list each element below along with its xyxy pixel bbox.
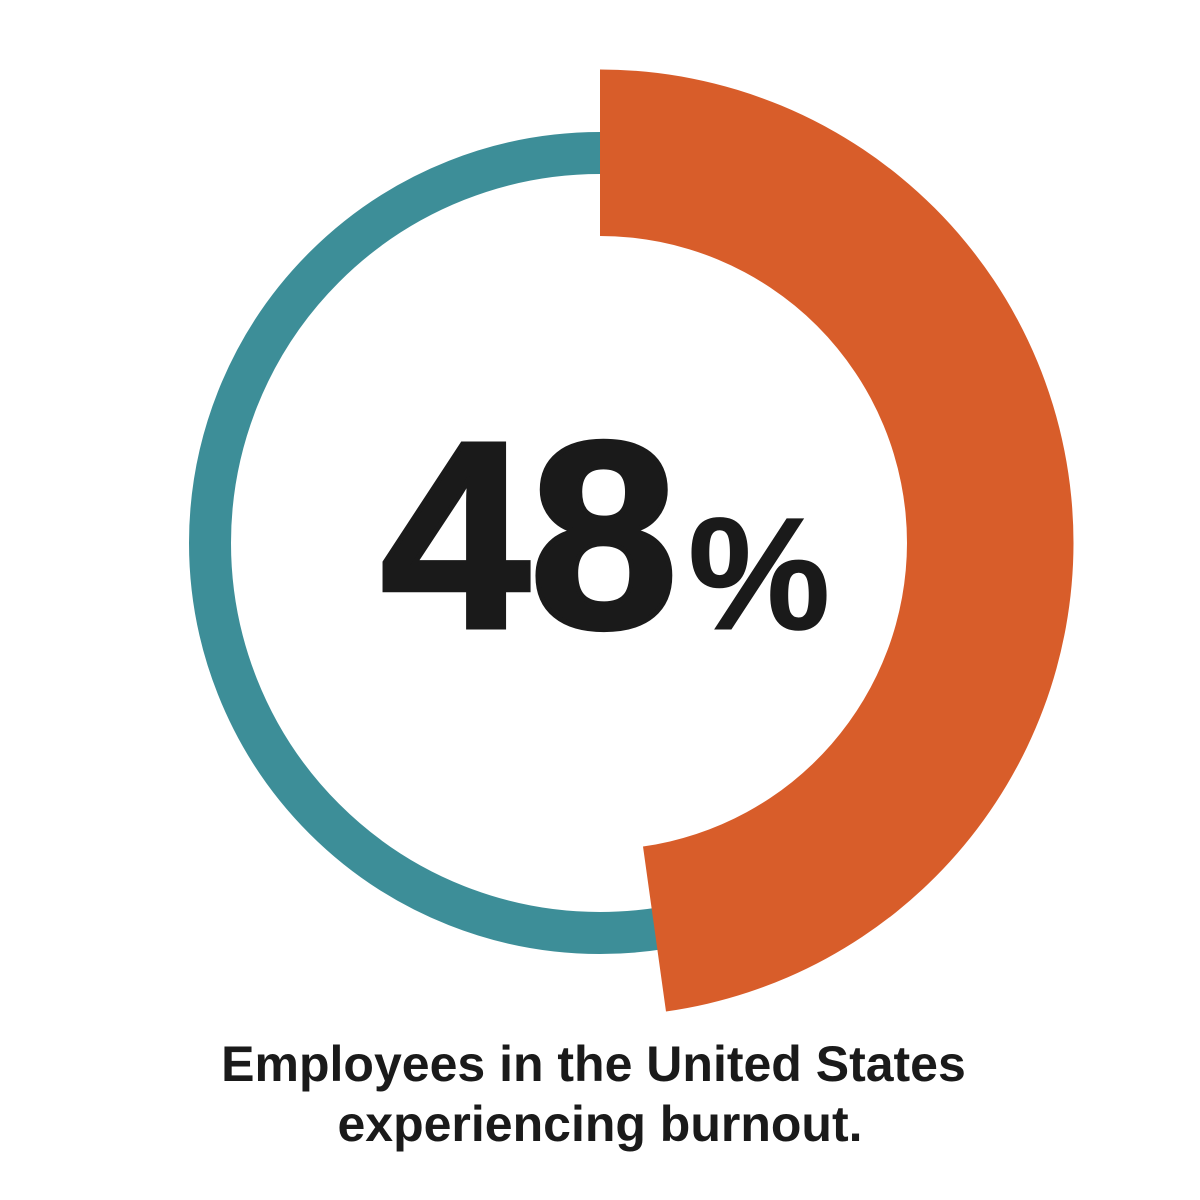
caption line 1: Employees in the United States (221, 1036, 966, 1092)
percent sign: % (688, 484, 830, 663)
caption line 2: experiencing burnout. (337, 1096, 863, 1152)
donut segment: 48% burnout (orange) (600, 70, 1074, 1012)
donut segment: remaining share (teal) (210, 153, 990, 933)
caption (221, 1036, 966, 1152)
number 48: 48 (381, 387, 678, 684)
central statistic: 48% (381, 387, 830, 684)
